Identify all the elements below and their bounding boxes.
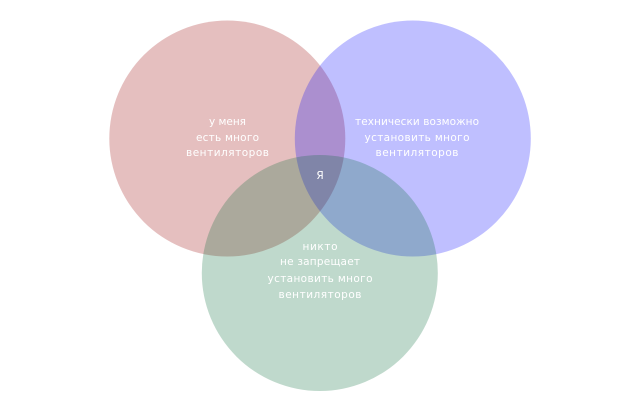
label: centre: Я	[316, 170, 324, 182]
label: nobody forbids: не запрещает	[280, 256, 360, 268]
circle: technically possible	[295, 20, 531, 256]
label: I have many fans: есть много	[196, 132, 259, 144]
label: I have many fans	[186, 116, 269, 159]
label: technically possible: вентиляторов	[376, 147, 458, 159]
label: nobody forbids: никто	[302, 241, 338, 253]
label: I have many fans: у меня	[209, 116, 246, 128]
circle: nobody forbids	[202, 155, 438, 391]
label: technically possible	[355, 116, 479, 159]
label: nobody forbids: установить много	[268, 273, 372, 285]
circle: I have many fans	[109, 20, 345, 256]
label: nobody forbids	[268, 241, 372, 301]
label: technically possible: технически возможно	[355, 116, 479, 128]
label: nobody forbids: вентиляторов	[278, 289, 362, 301]
label: technically possible: установить много	[364, 132, 470, 144]
label: I have many fans: вентиляторов	[186, 147, 269, 159]
